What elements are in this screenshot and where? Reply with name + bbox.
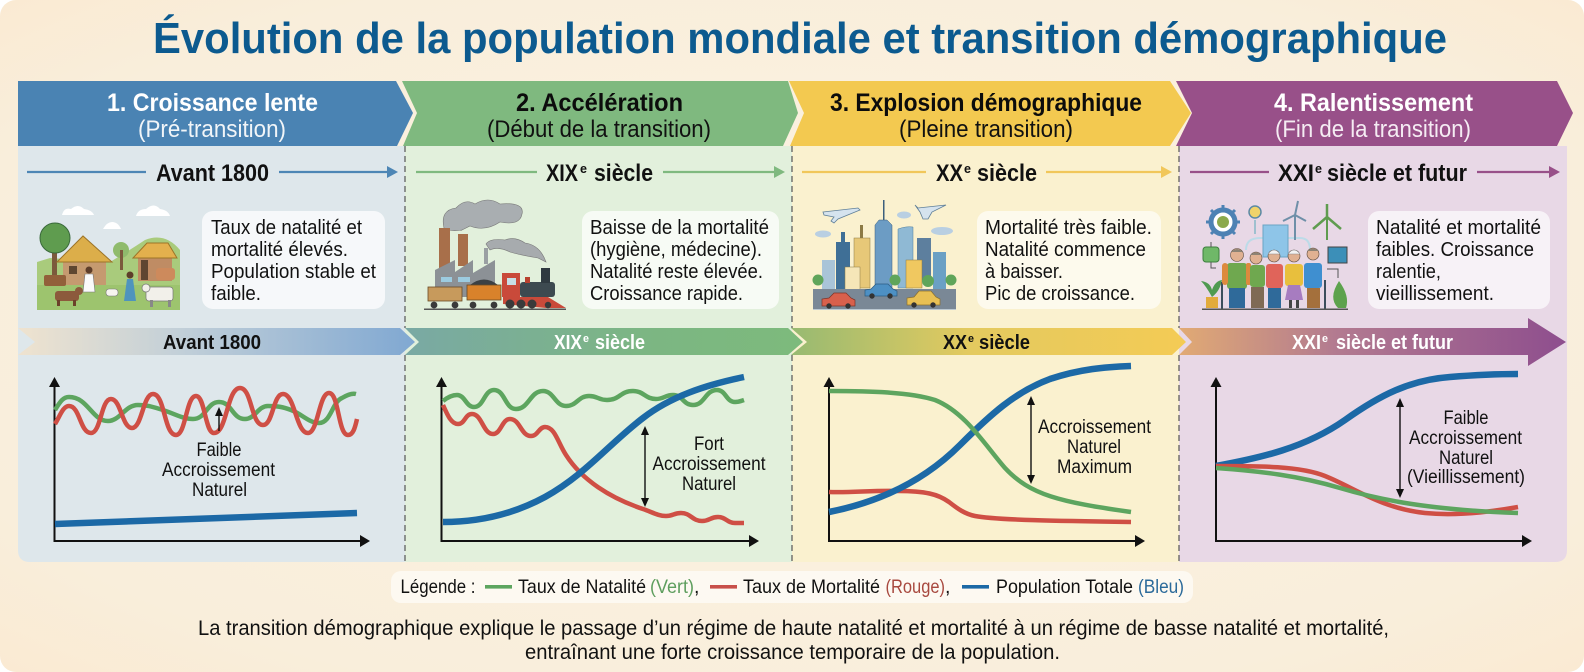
panel: column backgrounds: [18, 146, 1567, 562]
legend: [391, 571, 1193, 603]
timeline band: XXIe siècle et futur arrow: XXI: [1292, 332, 1321, 354]
period heading: XXe siècle: e: [964, 161, 971, 176]
text block: stage 3 description: Pic de croissance.: [985, 282, 1135, 305]
panel: stage 2 header: (Début de la transition): [487, 116, 711, 143]
period heading: XXe siècle: XX: [936, 160, 963, 187]
panel: stage 1 header: 1. Croissance lente: [107, 89, 318, 117]
text block: stage 1 description: mortalité élevés.: [211, 238, 348, 261]
panel: stage 2 header: 2. Accélération: [516, 89, 683, 117]
text block: stage 2 description: Croissance rapide.: [590, 282, 743, 305]
period heading: XXIe siècle et futur: siècle et futur: [1327, 160, 1467, 187]
chart: stage 4 curves: Naturel: [1439, 448, 1493, 469]
text block: stage 4 description: [1368, 211, 1550, 309]
text block: stage 4 description: vieillissement.: [1376, 282, 1494, 305]
caption text: [198, 616, 1389, 664]
text block: stage 4 description: faibles. Croissance: [1376, 238, 1534, 261]
chart: stage 4 curves: [1210, 374, 1532, 547]
period heading: XXe siècle: [802, 160, 1172, 187]
caption text: entraînant une forte croissance temporaire de la population.: [525, 640, 1060, 664]
legend: Légende :: [400, 576, 476, 598]
chart: stage 3 curves: Maximum: [1057, 457, 1132, 478]
chart: stage 2 curves: Naturel: [682, 474, 736, 495]
text block: stage 3 description: Natalité commence: [985, 238, 1146, 261]
panel: stage 2 header: [402, 81, 798, 146]
timeline band: Avant 1800: Avant 1800: [163, 332, 261, 354]
chart: stage 4 curves: Faible: [1444, 408, 1488, 429]
legend: (Vert): [650, 576, 694, 598]
period heading: XXe siècle: siècle: [977, 160, 1037, 187]
text block: stage 3 description: Mortalité très faible.: [985, 216, 1152, 239]
timeline band: XXIe siècle et futur arrow: [1179, 318, 1566, 366]
timeline band: XXe siècle: [791, 328, 1186, 355]
timeline band: Avant 1800: [18, 328, 415, 355]
panel: stage 1 header: (Pré-transition): [138, 116, 286, 143]
text block: stage 2 description: (hygiène, médecine).: [590, 238, 762, 261]
panel: stage 1 header: [18, 81, 413, 146]
chart: stage 1 curves: [49, 377, 370, 547]
text block: stage 1 description: faible.: [211, 282, 261, 305]
period heading: Avant 1800: [27, 160, 398, 187]
text block: stage 1 description: Taux de natalité et: [211, 216, 362, 239]
panel: stage 3 header: (Pleine transition): [899, 116, 1073, 143]
period heading: XXIe siècle et futur: [1190, 160, 1560, 187]
period heading: Avant 1800: Avant 1800: [156, 160, 269, 187]
title: Évolution de la population mondiale et transition démographique: [153, 13, 1447, 63]
panel: stage 4 header: [1176, 81, 1573, 146]
chart: stage 3 curves: Naturel: [1067, 437, 1121, 458]
period heading: XIXe siècle: [416, 160, 785, 187]
chart: stage 1 curves: Accroissement: [162, 460, 276, 481]
caption text: La transition démographique explique le passage d’un régime de haute natalité et mortalité à un régime de basse natalité et mortalité,: [198, 616, 1389, 640]
timeline band: XIXe siècle: [405, 328, 803, 355]
text block: stage 4 description: Natalité et mortalité: [1376, 216, 1541, 239]
period heading: XXIe siècle et futur: XXI: [1278, 160, 1314, 187]
icon: city skyline with planes and cars: [812, 200, 956, 310]
legend: (Bleu): [1138, 576, 1184, 598]
legend: Population Totale: [996, 576, 1133, 598]
chart: stage 2 curves: Fort: [694, 434, 725, 455]
text block: stage 3 description: [977, 211, 1161, 309]
legend: ,: [945, 576, 950, 598]
legend: ,: [694, 576, 699, 598]
legend: (Rouge): [886, 576, 945, 598]
legend: Taux de Mortalité: [743, 576, 880, 598]
text block: stage 2 description: Baisse de la mortalité: [590, 216, 769, 239]
timeline band: XXe siècle: e: [968, 333, 974, 345]
chart: stage 4 curves: Accroissement: [1409, 428, 1523, 449]
period heading: XIXe siècle: XIX: [546, 160, 578, 187]
icon: factory and steam train: [424, 200, 566, 310]
text block: stage 3 description: à baisser.: [985, 260, 1063, 283]
timeline band: XIXe siècle: siècle: [595, 332, 645, 354]
timeline band: XXIe siècle et futur arrow: e: [1322, 333, 1328, 345]
chart: stage 2 curves: [436, 377, 766, 547]
chart: stage 2 curves: Accroissement: [652, 454, 766, 475]
text block: stage 1 description: Population stable et: [211, 260, 376, 283]
text block: stage 2 description: [582, 211, 779, 309]
text block: stage 2 description: Natalité reste élevée.: [590, 260, 763, 283]
timeline band: XXe siècle: siècle: [979, 332, 1030, 354]
timeline band: XXe siècle: XX: [943, 332, 968, 354]
timeline band: XIXe siècle: e: [583, 333, 589, 345]
text block: stage 1 description: [202, 211, 385, 309]
panel: stage 4 header: (Fin de la transition): [1275, 116, 1471, 143]
timeline band: XIXe siècle: XIX: [554, 332, 583, 354]
panel: stage 4 header: 4. Ralentissement: [1274, 89, 1474, 117]
icon: elderly group with green technology: [1201, 201, 1348, 310]
timeline band: XXIe siècle et futur arrow: siècle et futur: [1336, 332, 1453, 354]
legend: Taux de Natalité: [518, 576, 646, 598]
period heading: XXIe siècle et futur: e: [1315, 161, 1322, 176]
icon: rural village: [37, 206, 180, 310]
panel: stage 3 header: 3. Explosion démographique: [830, 89, 1142, 117]
chart: stage 3 curves: Accroissement: [1038, 417, 1152, 438]
chart: stage 1 curves: Naturel: [192, 480, 247, 501]
period heading: XIXe siècle: e: [580, 161, 587, 176]
chart: stage 3 curves: [824, 366, 1152, 547]
panel: stage 3 header: [789, 81, 1191, 146]
chart: stage 4 curves: (Vieillissement): [1407, 467, 1525, 488]
period heading: XIXe siècle: siècle: [594, 160, 653, 187]
chart: stage 1 curves: Faible: [196, 440, 242, 461]
text block: stage 4 description: ralentie,: [1376, 260, 1441, 283]
